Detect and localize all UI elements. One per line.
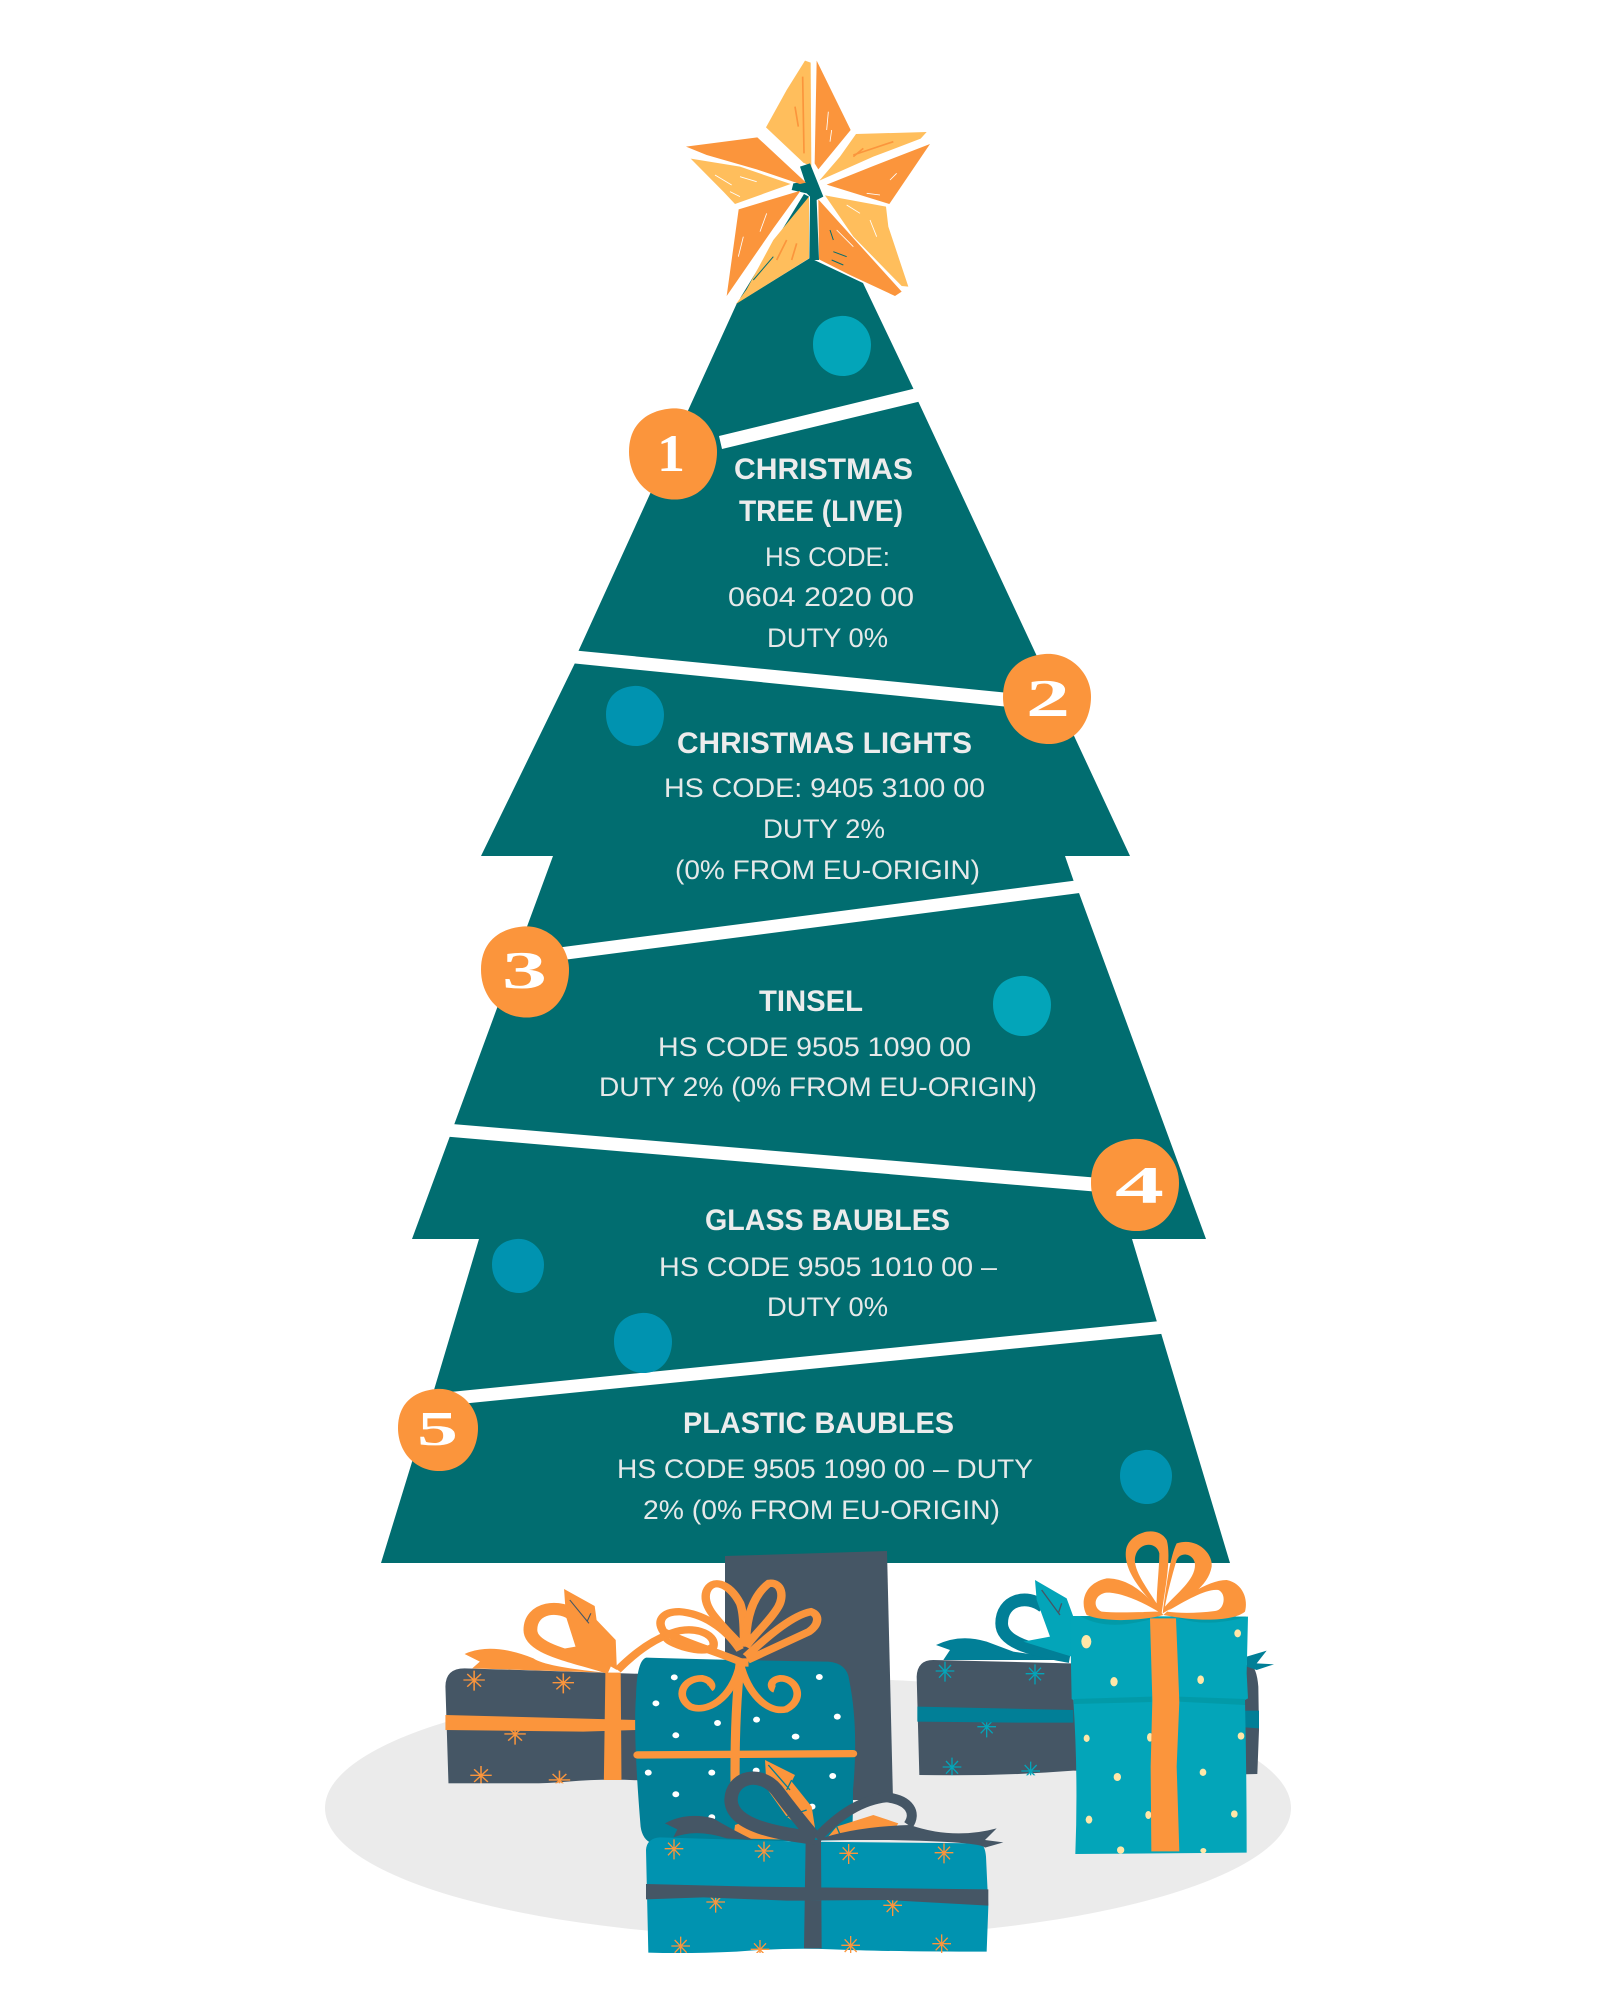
gift: right teal with orange ribbon and bow <box>1070 1531 1248 1854</box>
text: tree code and duty <box>728 542 914 653</box>
heading: plastic baubles: PLASTIC BAUBLES <box>683 1407 954 1440</box>
text: tinsel code and duty: DUTY 2% (0% FROM EU-ORIGIN) <box>599 1072 1037 1102</box>
bauble 2 <box>606 686 664 746</box>
icon: star tree topper <box>686 61 930 304</box>
white tier divider 4 <box>440 1123 1100 1192</box>
text: plastic baubles code and duty: 2% (0% FROM EU-ORIGIN) <box>643 1495 1000 1525</box>
text: tree code and duty: DUTY 0% <box>767 623 888 653</box>
bauble 5 <box>614 1313 672 1373</box>
white tier divider 1 <box>719 386 930 449</box>
number badge 2 <box>1003 654 1091 744</box>
text: lights code and duty: DUTY 2% <box>763 814 885 844</box>
tree trunk <box>725 1551 893 1800</box>
panel: plastic baubles <box>617 1407 1033 1525</box>
panel: glass baubles <box>659 1204 997 1322</box>
text: tinsel code and duty: HS CODE 9505 1090 00 <box>658 1032 971 1062</box>
white tier divider 2 <box>560 649 1020 708</box>
white tier divider 5 <box>420 1320 1170 1408</box>
ground shadow <box>325 1678 1291 1938</box>
text: tinsel code and duty <box>599 1032 1037 1102</box>
panel: christmas tree live <box>728 453 914 653</box>
bauble 3 <box>993 976 1051 1036</box>
number badge 1 <box>629 408 717 500</box>
number badge 1: 1 <box>657 425 685 483</box>
gift: back right dark with teal ribbon <box>917 1580 1274 1784</box>
text: lights code and duty: (0% FROM EU-ORIGIN) <box>675 855 980 885</box>
gift: centre teal with white dots <box>635 1583 855 1843</box>
text: glass baubles code and duty: HS CODE 9505 1010 00 – <box>659 1252 997 1282</box>
number badge 3 <box>481 926 569 1018</box>
text: glass baubles code and duty: DUTY 0% <box>767 1292 888 1322</box>
number badge 3: 3 <box>502 942 547 1000</box>
text: tree code and duty: HS CODE: <box>765 542 890 572</box>
heading: christmas tree: TREE (LIVE) <box>739 495 903 528</box>
bauble 6 <box>1120 1450 1172 1504</box>
text: lights code and duty <box>664 773 985 885</box>
bauble 4 <box>492 1239 544 1293</box>
bauble 1 <box>813 316 871 376</box>
number badge 5 <box>398 1389 478 1471</box>
text: plastic baubles code and duty: HS CODE 9505 1090 00 – DUTY <box>617 1454 1033 1484</box>
heading: christmas tree <box>734 453 913 528</box>
text: glass baubles code and duty <box>659 1252 997 1322</box>
text: lights code and duty: HS CODE: 9405 3100 00 <box>664 773 985 803</box>
heading: christmas tree: CHRISTMAS <box>734 453 913 486</box>
white tier divider 3 <box>540 878 1095 963</box>
number badge 4 <box>1091 1139 1179 1231</box>
panel: christmas lights <box>664 727 985 885</box>
number badge 5: 5 <box>417 1401 458 1456</box>
text: tree code and duty: 0604 2020 00 <box>728 582 914 612</box>
gift: front teal with dark ribbon <box>640 1760 1003 1963</box>
heading: christmas lights: CHRISTMAS LIGHTS <box>677 727 972 760</box>
number badge 2: 2 <box>1026 670 1070 728</box>
panel: tinsel <box>599 985 1037 1102</box>
heading: tinsel: TINSEL <box>759 985 863 1018</box>
heading: glass baubles: GLASS BAUBLES <box>705 1204 950 1237</box>
number badge 4: 4 <box>1115 1157 1164 1215</box>
gift: back left dark with orange ribbon <box>442 1589 714 1792</box>
christmas tree body <box>381 258 1230 1563</box>
text: plastic baubles code and duty <box>617 1454 1033 1525</box>
